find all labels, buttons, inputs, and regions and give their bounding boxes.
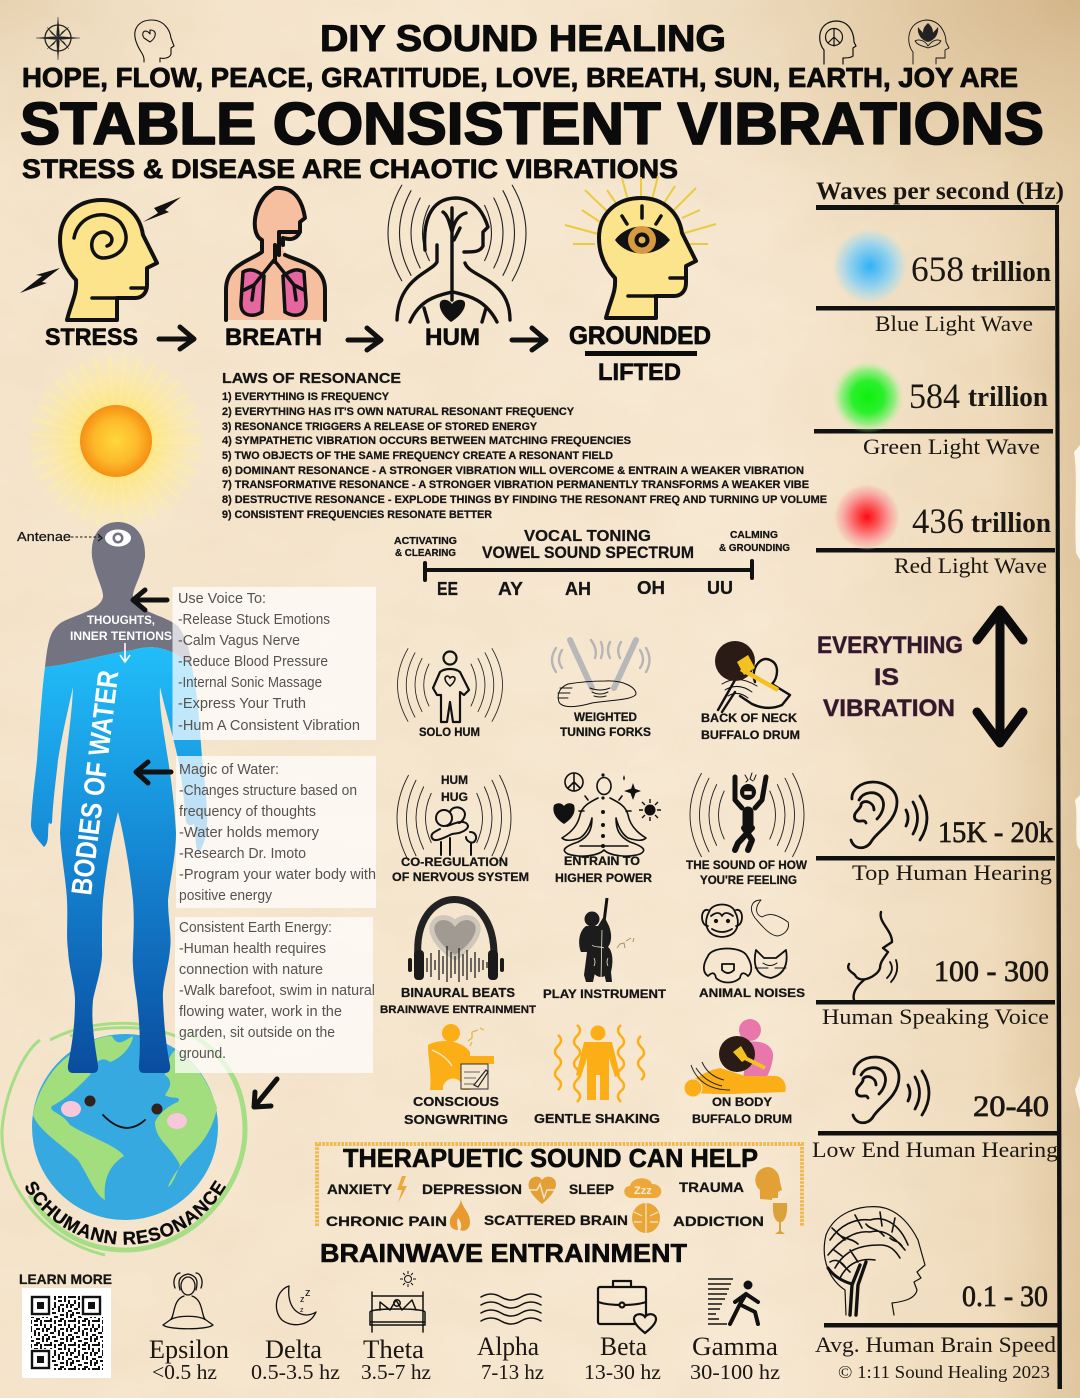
panel: therapeutic sound can help: THERAPUETIC SOUND CAN HELP	[343, 1143, 758, 1173]
vocal toning spectrum: VOWEL SOUND SPECTRUM	[482, 543, 694, 562]
panel: use voice to: -Calm Vagus Nerve	[178, 632, 300, 649]
avg human brain speed values	[815, 1280, 1056, 1357]
panel: use voice to: -Release Stuck Emotions	[178, 611, 330, 628]
qr code	[22, 1288, 111, 1378]
red light wave	[834, 484, 1051, 578]
panel: magic of water: -Water holds memory	[179, 824, 319, 841]
icon: hum head and heart	[388, 185, 526, 322]
human speaking voice values	[822, 955, 1049, 1029]
laws of resonance: 5) TWO OBJECTS OF THE SAME FREQUENCY CREATE A RESONANT FIELD	[222, 450, 613, 462]
delta: z	[300, 1307, 304, 1314]
label: co-regulation	[392, 855, 529, 884]
label: stress: STRESS	[45, 324, 138, 351]
icon: wine glass	[773, 1203, 787, 1234]
sun	[24, 349, 208, 533]
panel: therapeutic sound can help: SLEEP	[569, 1182, 614, 1197]
label: co-regulation: CO-REGULATION	[401, 855, 508, 869]
human speaking voice values: 100 - 300	[934, 955, 1049, 988]
copyright: © 1:11 Sound Healing 2023	[838, 1362, 1050, 1382]
everything is vibration: EVERYTHING	[817, 632, 963, 659]
everything is vibration: VIBRATION	[823, 695, 955, 722]
laws of resonance: 2) EVERYTHING HAS IT'S OWN NATURAL RESONANT FREQUENCY	[222, 406, 574, 418]
label: entrain to higher power: HIGHER POWER	[555, 871, 652, 885]
delta: z	[300, 1294, 305, 1304]
panel: magic of water: Magic of Water:	[179, 761, 279, 778]
icon: binaural beats headphones	[408, 900, 504, 982]
label: thoughts: THOUGHTS,	[87, 615, 155, 627]
avg human brain speed values: 0.1 - 30	[962, 1280, 1048, 1313]
label: play instrument: PLAY INSTRUMENT	[543, 987, 667, 1001]
label: solo hum: SOLO HUM	[419, 727, 480, 739]
icon: heart	[528, 1177, 556, 1204]
laws of resonance: 7) TRANSFORMATIVE RESONANCE - A STRONGER VIBRATION PERMANENTLY TRANSFORMS A WEAKER VIBE	[222, 479, 809, 491]
panel: therapeutic sound can help: SCATTERED BRAIN	[484, 1213, 628, 1228]
label: gentle shaking: GENTLE SHAKING	[534, 1111, 660, 1126]
label: lifted: LIFTED	[598, 359, 681, 386]
green light wave: Green Light Wave	[863, 434, 1040, 459]
icon: flame	[450, 1199, 470, 1231]
icon: stress head	[20, 197, 181, 320]
vocal toning spectrum: EE	[437, 579, 458, 599]
label: weighted tuning forks	[560, 712, 651, 739]
label: hum: HUM	[425, 324, 480, 351]
arrow: water	[136, 762, 171, 783]
blue light wave: 658	[911, 249, 964, 289]
icon: bolt	[397, 1176, 407, 1203]
everything is vibration	[817, 632, 963, 722]
theta: Theta	[363, 1335, 424, 1364]
label: breath: BREATH	[225, 324, 322, 351]
vocal toning spectrum: AH	[565, 579, 591, 599]
icon: grounded head with eye	[565, 176, 716, 318]
panel: magic of water: -Program your water body with	[179, 866, 376, 883]
learn more label: LEARN MORE	[19, 1271, 112, 1287]
theta: 3.5-7 hz	[361, 1360, 431, 1384]
icon: entrain to higher power	[553, 773, 661, 856]
avg human brain speed values: Avg. Human Brain Speed	[815, 1332, 1056, 1357]
laws of resonance: LAWS OF RESONANCE	[222, 370, 401, 387]
laws of resonance: 4) SYMPATHETIC VIBRATION OCCURS BETWEEN MATCHING FREQUENCIES	[222, 435, 631, 447]
heading: brainwave entrainment: BRAINWAVE ENTRAINMENT	[320, 1238, 687, 1268]
label: on body buffalo drum	[692, 1095, 792, 1126]
label: on body buffalo drum: ON BODY	[712, 1095, 772, 1109]
arrow	[512, 328, 546, 350]
icon: brain profile	[824, 1207, 925, 1315]
icon: head with lotus	[909, 20, 949, 64]
green light wave: trillion	[968, 381, 1048, 413]
icon: breath lungs	[226, 188, 325, 320]
panel: magic of water: -Changes structure based on	[179, 782, 357, 799]
panel: magic of water: -Research Dr. Imoto	[179, 845, 306, 862]
panel: consistent earth energy	[175, 917, 375, 1073]
gamma: Gamma	[692, 1332, 778, 1361]
panel: therapeutic sound can help: ANXIETY	[327, 1182, 392, 1197]
alpha: Alpha	[477, 1332, 539, 1361]
vocal toning spectrum: CALMING	[730, 530, 778, 541]
icon: animal noises	[702, 900, 789, 982]
beta: 13-30 hz	[584, 1360, 661, 1384]
top human hearing values: Top Human Hearing	[852, 860, 1052, 885]
vocal toning spectrum: ACTIVATING	[394, 536, 457, 547]
panel: consistent earth energy: -Walk barefoot, swim in natural	[179, 982, 375, 999]
vocal toning spectrum	[394, 528, 790, 599]
icon: back of neck buffalo drum	[715, 641, 790, 712]
panel: use voice to: -Express Your Truth	[178, 695, 306, 712]
right panel: frequency scale	[812, 178, 1064, 1389]
label: entrain to higher power: ENTRAIN TO	[564, 854, 640, 868]
icon: head with heart	[135, 20, 174, 62]
icon: ear top hearing	[851, 782, 927, 848]
epsilon: <0.5 hz	[152, 1360, 217, 1384]
blue light wave: Blue Light Wave	[875, 311, 1033, 336]
vocal toning spectrum: OH	[637, 578, 665, 598]
label: conscious songwriting: CONSCIOUS	[413, 1095, 499, 1109]
earth with schumann resonance	[0, 1022, 248, 1256]
red light wave: 436	[912, 501, 964, 541]
arrow: to earth	[254, 1079, 277, 1107]
icon: brain	[632, 1203, 660, 1233]
vocal toning spectrum: AY	[498, 579, 523, 599]
label: binaural beats: BINAURAL BEATS	[401, 986, 515, 1000]
label: antenae: Antenae	[17, 530, 71, 544]
label: conscious songwriting: SONGWRITING	[404, 1113, 508, 1127]
vocal toning spectrum: & GROUNDING	[719, 543, 790, 554]
blue light wave: trillion	[971, 256, 1051, 288]
icon: hum hug co-regulation	[397, 775, 511, 861]
alpha	[477, 1294, 544, 1384]
laws of resonance: 3) RESONANCE TRIGGERS A RELEASE OF STORED ENERGY	[222, 421, 537, 433]
delta: z	[305, 1287, 310, 1299]
panel: magic of water	[176, 756, 376, 908]
panel: therapeutic sound can help: ADDICTION	[673, 1214, 764, 1229]
panel: use voice to: -Hum A Consistent Vibration	[178, 717, 360, 734]
panel: consistent earth energy: connection with nature	[179, 961, 323, 978]
icon: play instrument	[579, 898, 634, 982]
icon: sound of how you are feeling	[690, 773, 804, 857]
arrow	[159, 327, 194, 349]
label: back of neck buffalo drum	[701, 711, 800, 742]
icon: head with peace sign	[820, 21, 856, 64]
laws of resonance: 1) EVERYTHING IS FREQUENCY	[222, 391, 389, 403]
epsilon	[149, 1273, 229, 1384]
icon: hum hug co-regulation: HUG	[441, 792, 468, 804]
icon: ear low hearing	[853, 1057, 929, 1123]
panel: therapeutic sound can help: DEPRESSION	[422, 1182, 522, 1197]
label: conscious songwriting	[404, 1095, 508, 1127]
low end hearing values	[812, 1090, 1058, 1162]
earth with schumann resonance: SCHUMANN RESONANCE	[25, 1180, 226, 1245]
panel: therapeutic sound can help: TRAUMA	[679, 1180, 744, 1195]
laws of resonance: 6) DOMINANT RESONANCE - A STRONGER VIBRATION WILL OVERCOME & ENTRAIN A WEAKER VIBRATION	[222, 465, 804, 477]
label: weighted tuning forks: TUNING FORKS	[560, 727, 651, 739]
human speaking voice values: Human Speaking Voice	[822, 1004, 1049, 1029]
icon: solo hum	[398, 649, 502, 722]
gamma: 30-100 hz	[690, 1360, 780, 1384]
top human hearing values	[852, 816, 1053, 885]
green light wave	[832, 361, 1048, 459]
label: sound of how you are feeling	[686, 860, 807, 887]
panel: therapeutic sound can help: CHRONIC PAIN	[326, 1214, 447, 1229]
green light wave: 584	[909, 376, 960, 416]
beta: Beta	[600, 1332, 647, 1361]
label: back of neck buffalo drum: BACK OF NECK	[701, 711, 797, 725]
panel: magic of water: frequency of thoughts	[179, 803, 316, 820]
label: antenae	[17, 530, 102, 544]
theta	[361, 1271, 431, 1384]
double arrow	[977, 610, 1023, 743]
icon: compass	[36, 17, 80, 60]
icon: third eye	[105, 530, 131, 546]
divider under grounded	[585, 351, 697, 356]
arrow: voice	[133, 590, 167, 610]
everything is vibration: IS	[874, 664, 899, 691]
laws of resonance: 9) CONSISTENT FREQUENCIES RESONATE BETTER	[222, 509, 492, 521]
low end hearing values: 20-40	[973, 1090, 1049, 1123]
label: sound of how you are feeling: THE SOUND OF HOW	[686, 860, 807, 872]
subtitle: positive vibrations: HOPE, FLOW, PEACE, GRATITUDE, LOVE, BREATH, SUN, EARTH, JOY ARE	[22, 62, 1018, 93]
panel: use voice to	[172, 587, 376, 740]
blue light wave	[832, 228, 1051, 336]
title: DIY SOUND HEALING	[320, 18, 726, 59]
label: animal noises: ANIMAL NOISES	[699, 986, 805, 1000]
panel: consistent earth energy: ground.	[179, 1045, 226, 1062]
human body silhouette	[31, 522, 207, 1073]
red light wave: Red Light Wave	[894, 553, 1047, 578]
laws of resonance	[222, 370, 827, 521]
delta: 0.5-3.5 hz	[251, 1360, 340, 1384]
label: back of neck buffalo drum: BUFFALO DRUM	[701, 728, 800, 742]
label: weighted tuning forks: WEIGHTED	[574, 712, 637, 724]
icon: speaking face	[848, 912, 897, 1000]
icon: conscious songwriting	[428, 1024, 494, 1092]
delta	[251, 1286, 340, 1384]
vocal toning spectrum: UU	[707, 578, 733, 598]
heading: waves per second: Waves per second (Hz)	[816, 178, 1064, 205]
epsilon: Epsilon	[149, 1335, 229, 1364]
label: bodies of water: BODIES OF WATER	[66, 669, 125, 897]
beta	[584, 1281, 661, 1384]
arrow	[348, 328, 381, 350]
icon: hum hug co-regulation: HUM	[441, 775, 468, 787]
panel: magic of water: positive energy	[179, 887, 272, 904]
vocal toning spectrum: & CLEARING	[395, 548, 456, 559]
top human hearing values: 15K - 20k	[938, 816, 1053, 849]
laws of resonance: 8) DESTRUCTIVE RESONANCE - EXPLODE THINGS BY FINDING THE RESONANT FREQ AND TURNING UP VOLUME	[222, 494, 827, 506]
panel: therapeutic sound can help	[317, 1143, 802, 1234]
label: binaural beats	[380, 986, 536, 1016]
label: inner tentions: INNER TENTIONS	[70, 631, 172, 643]
delta: Delta	[265, 1335, 322, 1364]
vocal toning spectrum: VOCAL TONING	[524, 528, 651, 545]
red light wave: trillion	[971, 507, 1051, 539]
icon: sleep cloud	[624, 1178, 661, 1198]
label: entrain to higher power	[555, 854, 652, 885]
label: sound of how you are feeling: YOU'RE FEELING	[700, 875, 797, 887]
label: co-regulation: OF NERVOUS SYSTEM	[392, 870, 529, 884]
icon: trauma head	[755, 1167, 782, 1200]
gamma	[690, 1279, 780, 1384]
icon: gentle shaking	[555, 1025, 644, 1102]
label: grounded: GROUNDED	[569, 322, 711, 350]
subtitle: chaotic vibrations: STRESS & DISEASE ARE CHAOTIC VIBRATIONS	[22, 154, 678, 184]
alpha: 7-13 hz	[481, 1360, 544, 1384]
icon: weighted tuning forks	[552, 640, 650, 707]
low end hearing values: Low End Human Hearing	[812, 1137, 1058, 1162]
panel: use voice to: -Reduce Blood Pressure	[178, 653, 328, 670]
panel: consistent earth energy: flowing water, work in the	[179, 1003, 342, 1020]
main heading: STABLE CONSISTENT VIBRATIONS	[20, 91, 1044, 157]
label: binaural beats: BRAINWAVE ENTRAINMENT	[380, 1004, 536, 1016]
icon: on body buffalo drum	[684, 1019, 786, 1097]
arrow: thoughts to water	[120, 643, 130, 662]
icon: sleep cloud: Zzz	[634, 1185, 652, 1197]
panel: consistent earth energy: garden, sit outside on the	[179, 1024, 335, 1041]
panel: use voice to: Use Voice To:	[178, 590, 266, 607]
panel: consistent earth energy: -Human health requires	[179, 940, 326, 957]
panel: use voice to: -Internal Sonic Massage	[178, 674, 322, 691]
label: on body buffalo drum: BUFFALO DRUM	[692, 1112, 792, 1126]
panel: consistent earth energy: Consistent Earth Energy:	[179, 919, 332, 936]
